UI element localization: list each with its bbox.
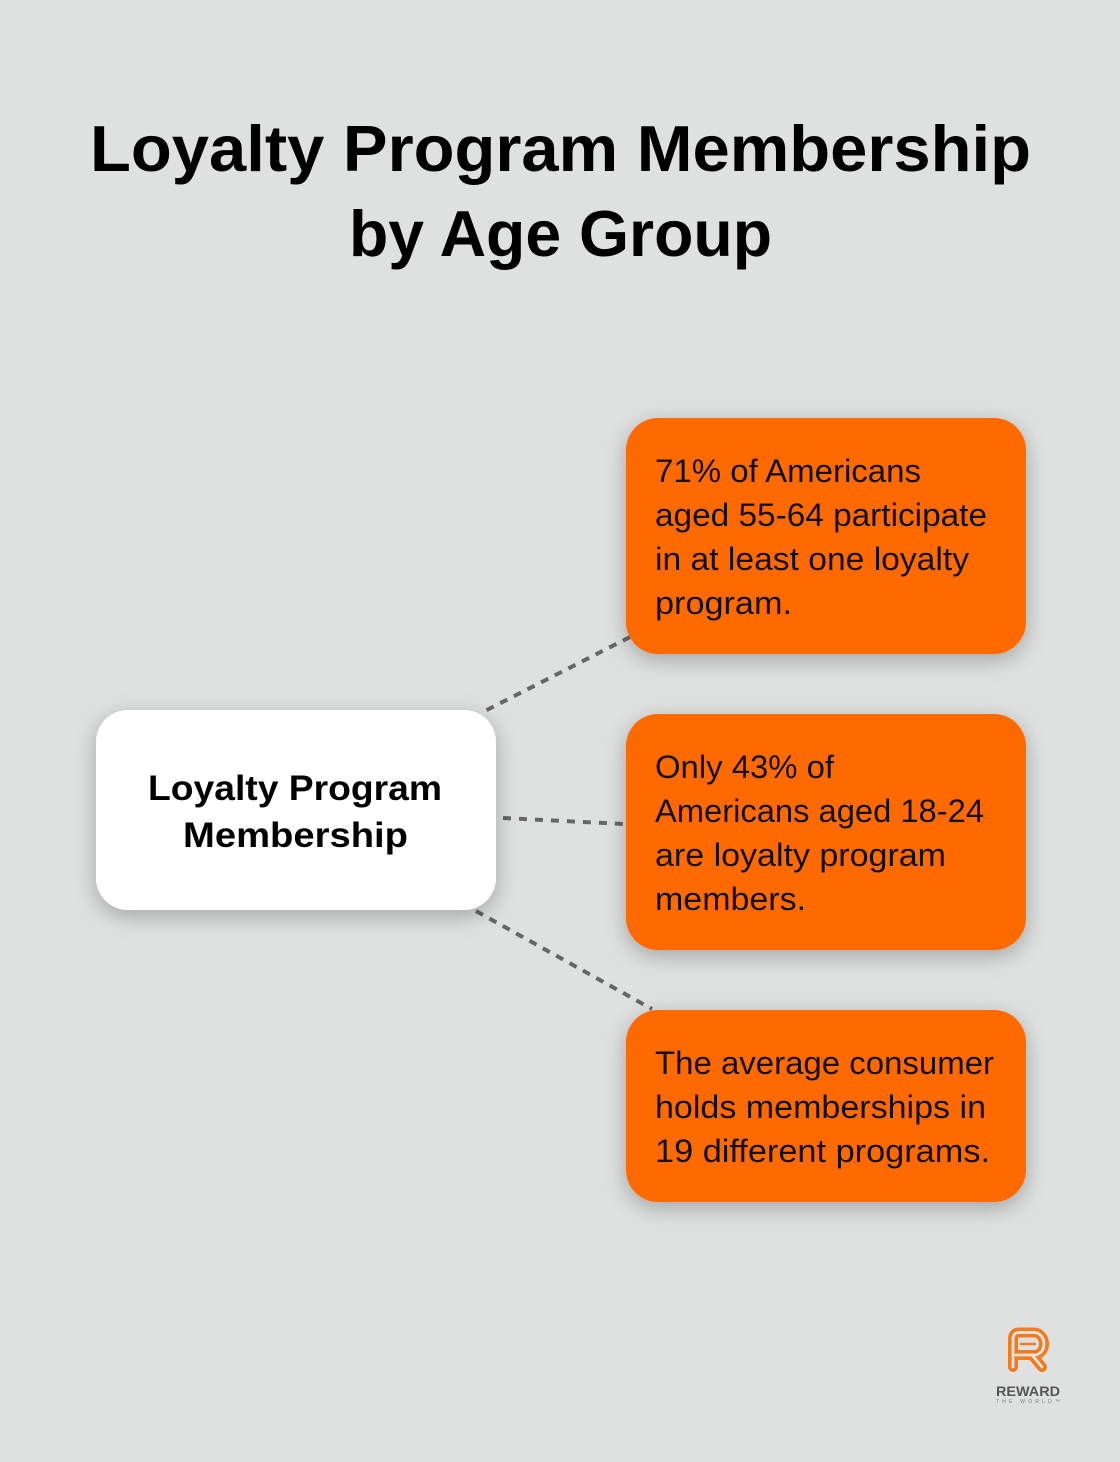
43% card text: Americans aged 18-24 <box>655 793 984 829</box>
43% card text: members. <box>655 881 806 917</box>
43% card text: are loyalty program <box>655 837 946 873</box>
logo wordmark: REWARD <box>996 1383 1060 1399</box>
71% card text <box>655 453 987 621</box>
icon: R mark <box>1013 1332 1044 1367</box>
71% card text: aged 55-64 participate <box>655 497 987 533</box>
19 programs card text: The average consumer <box>655 1045 994 1081</box>
19 programs card text: holds memberships in <box>655 1089 986 1125</box>
43% card text: Only 43% of <box>655 749 834 785</box>
central node label <box>148 769 442 855</box>
title: by Age Group <box>349 197 772 270</box>
71% card text: program. <box>655 585 792 621</box>
connector: membership to 71% card <box>481 637 630 713</box>
title <box>90 112 1031 270</box>
title: Loyalty Program Membership <box>90 112 1031 185</box>
19 programs card text <box>655 1045 994 1169</box>
panel: 19 programs card <box>626 1010 1026 1202</box>
panel: central node <box>96 710 496 910</box>
19 programs card text: 19 different programs. <box>655 1133 990 1169</box>
43% card text <box>655 749 984 917</box>
central node label: Loyalty Program <box>148 769 442 808</box>
connector: membership to 19 programs card <box>476 911 652 1009</box>
71% card text: 71% of Americans <box>655 453 921 489</box>
panel: 71% card <box>626 418 1026 654</box>
logo tagline: THE WORLD™ <box>996 1399 1060 1405</box>
central node label: Membership <box>183 816 408 855</box>
logo: Reward the World <box>996 1332 1060 1405</box>
71% card text: in at least one loyalty <box>655 541 969 577</box>
panel: 43% card <box>626 714 1026 950</box>
connector: membership to 43% card <box>503 818 624 824</box>
